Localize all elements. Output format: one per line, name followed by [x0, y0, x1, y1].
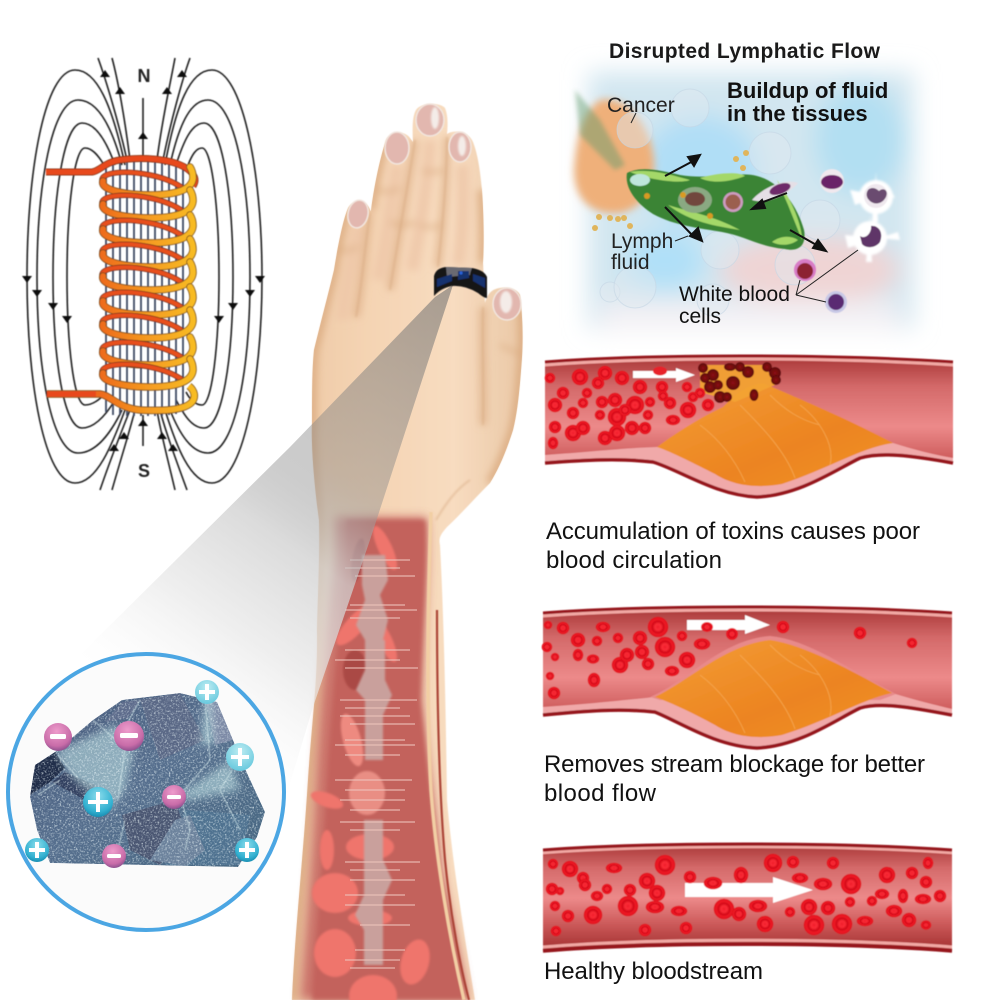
ring — [434, 267, 487, 298]
magnetic field lines — [27, 58, 262, 490]
label: buildup of fluid: Buildup of fluid — [727, 78, 888, 103]
vessel 2: blockage removed — [542, 607, 952, 748]
red blood cells in arm — [309, 523, 434, 1000]
lymphatic flow panel — [574, 40, 914, 330]
pole label S: S — [138, 461, 150, 481]
top wall — [545, 356, 953, 362]
arm blood vessel overlay — [300, 512, 469, 1000]
coil core lines — [106, 160, 183, 416]
arrow — [687, 615, 770, 634]
cancer mass — [574, 99, 654, 213]
fluid droplets — [592, 150, 749, 231]
illustration: hand with ring and arm — [131, 103, 524, 1000]
central spiked column — [355, 555, 392, 965]
plaque — [657, 383, 893, 486]
caption 1: Accumulation of toxins causes poor — [546, 518, 920, 545]
leader lines — [631, 113, 858, 302]
arrow — [633, 368, 695, 382]
heading: Disrupted Lymphatic Flow: Disrupted Lymphatic Flow — [609, 40, 881, 63]
caption 1: blood circulation — [546, 547, 722, 574]
walls — [543, 844, 952, 850]
quartz veins — [55, 700, 240, 810]
diagram: electromagnetic coil — [22, 58, 265, 490]
stone — [25, 690, 270, 870]
caption 2: blood flow — [544, 780, 657, 807]
field line arrowheads — [22, 70, 265, 451]
circle callout: tourmaline stone with ions — [8, 654, 284, 930]
vessel 1: toxin accumulation — [545, 356, 953, 497]
caption 2: Removes stream blockage for better — [544, 751, 925, 778]
vessel 3: healthy bloodstream — [543, 844, 952, 952]
red blood cells — [546, 854, 946, 936]
negative ions — [44, 721, 186, 868]
arrow — [685, 877, 813, 903]
red blood cells — [542, 617, 917, 699]
label: White blood cells: White blood — [679, 283, 790, 306]
skin edge and finger shading — [292, 137, 523, 1000]
label: White blood cells: cells — [679, 305, 721, 328]
panel haze background — [588, 72, 914, 330]
label: Cancer: Cancer — [607, 94, 675, 117]
cells over arrow — [701, 622, 738, 640]
grey projection beam from ring to circle — [80, 285, 453, 800]
lymph vessel — [627, 169, 805, 250]
label: buildup of fluid: in the tissues — [727, 101, 868, 126]
vessel body — [543, 607, 952, 748]
circle frame — [8, 654, 284, 930]
top wall — [543, 607, 952, 613]
tendon stripes — [428, 512, 464, 1000]
pale tissue cells — [600, 89, 840, 316]
caption 3: Healthy bloodstream — [544, 958, 763, 985]
label: Lymph fluid: fluid — [611, 251, 650, 274]
hand and arm skin — [292, 104, 523, 1000]
copper coil — [46, 159, 195, 410]
white blood cells — [794, 169, 900, 313]
positive ions — [25, 680, 259, 862]
plaque — [650, 636, 896, 700]
fingernails — [345, 104, 521, 320]
bottom wall — [543, 693, 952, 748]
stone speckle texture — [25, 690, 270, 870]
pole label N: N — [138, 66, 150, 86]
streak lines — [335, 560, 420, 968]
vessel body — [545, 356, 953, 497]
label: Lymph fluid: Lymph — [611, 230, 673, 253]
vessel body — [543, 844, 952, 952]
red blood cells — [545, 366, 714, 449]
black flow arrows — [665, 155, 826, 251]
toxin clusters — [698, 362, 781, 403]
bottom wall — [545, 443, 953, 497]
